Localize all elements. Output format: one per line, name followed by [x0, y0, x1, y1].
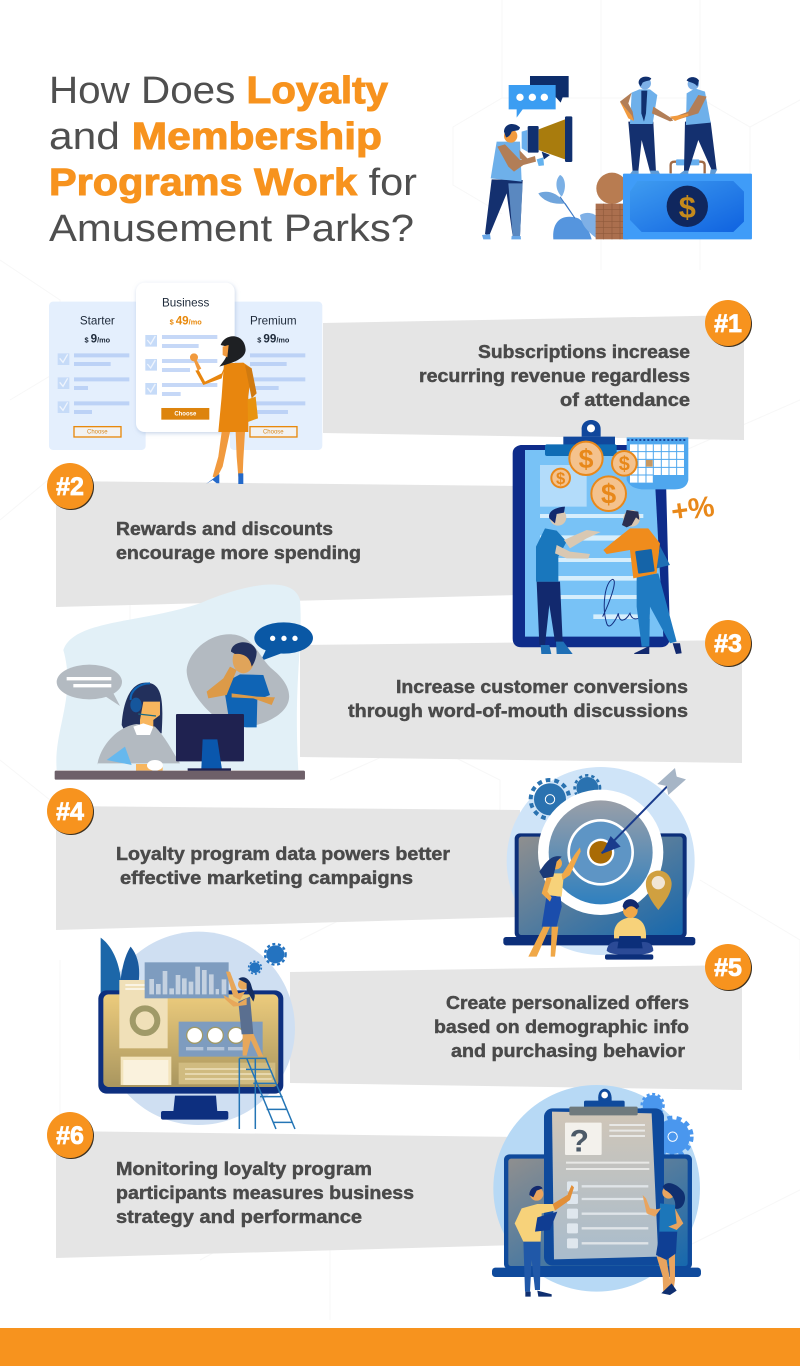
- panel: #1 band: [323, 315, 744, 440]
- title: Amusement Parks?: [49, 208, 414, 250]
- icon: blue speech bubble: [254, 622, 313, 661]
- background circle: [507, 767, 695, 955]
- figure: sitting man with laptop: [605, 899, 653, 960]
- title: and Membership: [49, 116, 382, 158]
- badge: #2: [47, 463, 94, 510]
- panel: starter plan: $ 9/mo: [85, 333, 111, 346]
- background circle: [102, 932, 295, 1125]
- footer bar: [0, 1328, 800, 1366]
- text: point 4: [116, 843, 450, 888]
- badge: #3: #3: [714, 630, 742, 658]
- icon: clipboard: [544, 1089, 664, 1266]
- badge: #3: [705, 620, 752, 667]
- icon: clipboard: ?: [570, 1123, 589, 1159]
- background circle: [493, 1085, 700, 1292]
- figure: man on phone in gray blob: [187, 634, 289, 727]
- illustration: pricing plans and woman: [49, 283, 322, 484]
- figure: woman on ladder: [223, 972, 263, 1057]
- panel: #5 band: [290, 965, 742, 1090]
- panel: premium plan: Premium: [250, 314, 297, 327]
- panel: #6 band: [56, 1131, 520, 1258]
- text: point 4: effective marketing campaigns: [120, 867, 413, 888]
- panel: #2 band: [56, 481, 520, 607]
- text: point 6: [116, 1158, 414, 1227]
- icon: gears: [642, 1094, 692, 1156]
- figure: woman in orange dress: [190, 336, 258, 484]
- text: coin dollar signs: $: [619, 454, 630, 476]
- illustration: questionnaire clipboard: [492, 1085, 701, 1297]
- title: Programs Work for: [49, 162, 417, 204]
- figure: man in tie shaking hands: [620, 77, 673, 174]
- icon: arrow: [602, 768, 686, 854]
- icon: monitor: [98, 990, 283, 1120]
- text: point 6: participants measures business: [116, 1182, 414, 1203]
- panel: starter plan: Starter: [80, 314, 115, 327]
- figure: agent with headset: [97, 683, 180, 771]
- badge: #6: [47, 1112, 94, 1159]
- badge: #1: [705, 300, 752, 347]
- figure: man with megaphone: [482, 124, 536, 239]
- figure: woman gesturing: [643, 1183, 685, 1295]
- badge: #2: #2: [56, 473, 84, 501]
- title: [49, 70, 417, 250]
- icon: laptop: [503, 833, 695, 945]
- desk: [55, 771, 305, 780]
- panel: business plan: $ 49/mo: [170, 315, 202, 328]
- icon: clipboard: [513, 420, 670, 647]
- text: point 2: [116, 518, 361, 563]
- text: point 6: Monitoring loyalty program: [116, 1158, 372, 1179]
- text: point 3: Increase customer conversions: [396, 676, 688, 697]
- icon: laptop: [492, 1154, 701, 1277]
- text: point 2: Rewards and discounts: [116, 518, 333, 539]
- text: point 5: based on demographic info: [434, 1016, 689, 1037]
- text: coin dollar signs: $: [579, 444, 594, 474]
- panel: gauges card: [179, 1022, 263, 1057]
- icon: megaphone: [522, 116, 572, 166]
- illustration: marketing and handshake on money: [482, 76, 752, 239]
- panel: business plan: Choose: [174, 412, 197, 418]
- text: point 1: of attendance: [560, 389, 690, 410]
- panel: premium plan: Choose: [263, 430, 284, 436]
- text: point 6: strategy and performance: [116, 1206, 362, 1227]
- badge: #5: #5: [714, 954, 742, 982]
- figure: man pointing: [515, 1185, 574, 1297]
- icon: coins: [551, 442, 637, 511]
- text: point 2: encourage more spending: [116, 542, 361, 563]
- figure: bearded man in orange shirt: [603, 510, 682, 654]
- panel: starter plan: [49, 302, 146, 450]
- panel: lower cards: [121, 1057, 275, 1085]
- text: point 4: Loyalty program data powers better: [116, 843, 450, 864]
- illustration: clipboard with handshake: [513, 420, 716, 654]
- panel: business plan: [136, 283, 235, 432]
- badge: #5: [705, 944, 752, 991]
- badge: #1: #1: [714, 310, 742, 338]
- panel: bar chart card: [145, 962, 229, 998]
- panel: donut card: [119, 980, 168, 1048]
- panel: #4 band: [56, 806, 520, 930]
- illustration: customer support call: [55, 585, 313, 780]
- text: point 1: [419, 341, 690, 410]
- text: point 3: through word-of-mouth discussions: [348, 700, 688, 721]
- icon: dollar banknote: [623, 159, 752, 239]
- icon: monitor: [176, 714, 244, 771]
- text: point 5: Create personalized offers: [446, 992, 689, 1013]
- icon: gears: [249, 944, 286, 974]
- icon: dollar banknote: $: [679, 191, 696, 225]
- icon: coin stack: [596, 173, 628, 239]
- illustration: target with arrow and laptop: [503, 767, 695, 960]
- title: How Does Loyalty: [49, 70, 388, 112]
- panel: #3 band: [300, 640, 742, 763]
- background blob: [56, 585, 301, 770]
- panel: business plan: Business: [162, 296, 209, 309]
- panel: premium plan: $ 99/mo: [257, 333, 290, 346]
- figure: man in blue shirt: [536, 507, 601, 654]
- text: coin dollar signs: $: [601, 478, 616, 509]
- icon: gray speech bubble: [57, 665, 122, 706]
- badge: #6: #6: [56, 1122, 84, 1150]
- icon: plant: [538, 175, 597, 239]
- figure: standing woman: [528, 847, 581, 957]
- text: point 3: [348, 676, 688, 721]
- badge: #4: [47, 788, 94, 835]
- icon: target: [538, 790, 663, 915]
- icon: leaves: [101, 938, 139, 997]
- text: point 5: [434, 992, 689, 1061]
- illustration: dashboard monitor: [98, 932, 295, 1129]
- icon: chat bubbles: [509, 76, 569, 118]
- icon: location pin: [646, 871, 672, 910]
- icon: pin centre: [652, 876, 665, 889]
- icon: gears: [531, 775, 600, 819]
- text: coin dollar signs: $: [556, 469, 566, 488]
- panel: premium plan: [230, 302, 322, 450]
- icon: calendar: [627, 437, 688, 489]
- text: point 1: Subscriptions increase: [478, 341, 690, 362]
- text: plus percent: +%: [669, 490, 716, 529]
- text: coin dollar signs: [556, 444, 630, 509]
- figure: man shaking hands: [670, 77, 717, 174]
- text: point 5: and purchasing behavior: [451, 1040, 685, 1061]
- badge: #4: #4: [56, 798, 84, 826]
- panel: starter plan: Choose: [87, 430, 108, 436]
- text: point 1: recurring revenue regardless: [419, 365, 690, 386]
- icon: ladder: [239, 1058, 295, 1129]
